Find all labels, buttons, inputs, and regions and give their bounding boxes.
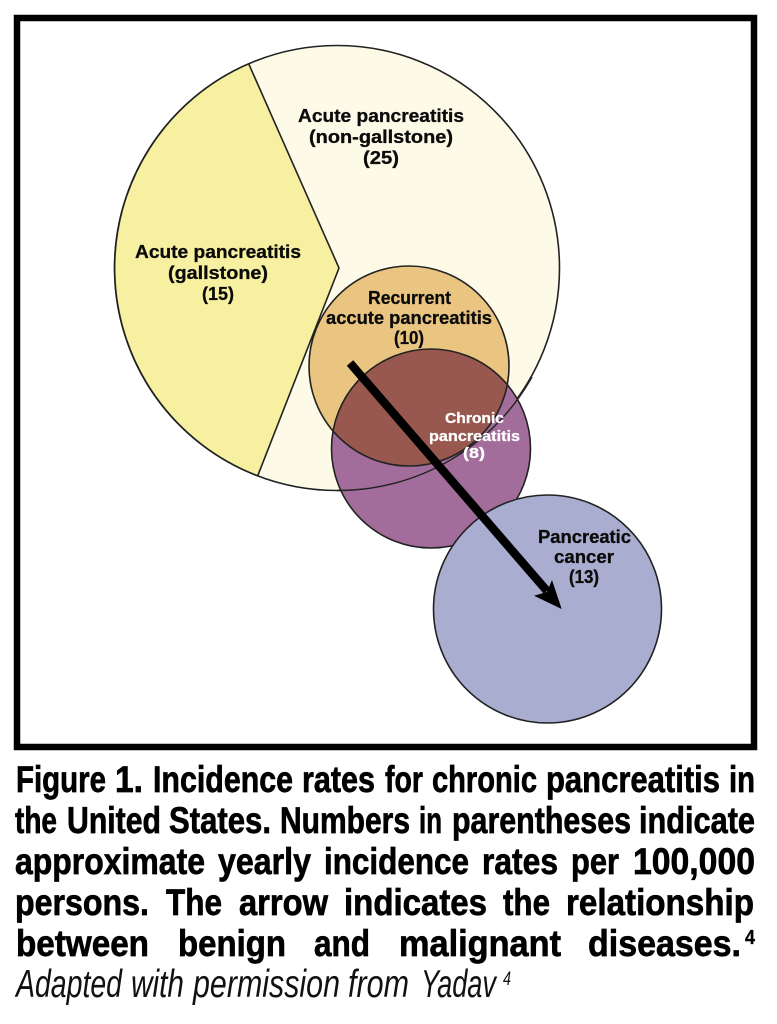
label: non-gallstone: (non-gallstone) bbox=[309, 127, 453, 147]
label: gallstone: (gallstone) bbox=[168, 263, 268, 283]
caption: for bbox=[385, 758, 423, 800]
label: non-gallstone: (25) bbox=[363, 148, 399, 168]
label: cancer: (13) bbox=[569, 567, 599, 587]
label: gallstone: (15) bbox=[202, 284, 234, 304]
circle: pancreatic cancer bbox=[434, 495, 662, 723]
label: non-gallstone: Acute pancreatitis bbox=[298, 106, 464, 126]
caption: benign bbox=[178, 922, 286, 964]
label: recurrent: accute pancreatitis bbox=[326, 308, 492, 328]
caption: parentheses bbox=[452, 799, 631, 841]
caption: persons. bbox=[15, 881, 149, 923]
caption: Incidence bbox=[153, 758, 293, 800]
caption: 100,000 bbox=[633, 840, 755, 882]
label: chronic: Chronic bbox=[445, 410, 504, 427]
caption: rates bbox=[302, 758, 375, 800]
caption: incidence bbox=[324, 840, 469, 882]
source credit: from bbox=[348, 963, 409, 1006]
caption: arrow bbox=[239, 881, 329, 923]
caption: United bbox=[67, 799, 161, 841]
label: recurrent: Recurrent bbox=[368, 288, 451, 308]
caption: The bbox=[166, 881, 222, 923]
overlap: recurrent and chronic bbox=[334, 350, 506, 466]
outline: recurrent circle bbox=[309, 266, 509, 466]
label: cancer bbox=[538, 527, 631, 587]
caption: per bbox=[571, 840, 619, 882]
source credit: 4 bbox=[503, 969, 511, 990]
label: cancer: cancer bbox=[554, 547, 614, 567]
caption: and bbox=[314, 922, 370, 964]
caption: States. bbox=[169, 799, 271, 841]
source credit: Adapted bbox=[15, 963, 123, 1006]
label: chronic: pancreatitis bbox=[429, 428, 520, 445]
segment: acute pancreatitis gallstone bbox=[115, 64, 339, 476]
caption bbox=[15, 758, 756, 964]
circle: recurrent acute pancreatitis bbox=[309, 266, 509, 466]
caption: 4 bbox=[745, 926, 756, 949]
caption: diseases. bbox=[588, 922, 741, 964]
caption: malignant bbox=[399, 922, 561, 964]
label: non-gallstone bbox=[298, 106, 464, 168]
caption: indicate bbox=[639, 799, 755, 841]
label: chronic: (8) bbox=[463, 445, 485, 462]
circle: acute pancreatitis non-gallstone bbox=[114, 46, 560, 490]
outline: chronic circle bbox=[332, 349, 530, 548]
caption: pancreatitis bbox=[546, 758, 720, 800]
source credit: permission bbox=[192, 963, 340, 1006]
label: gallstone bbox=[135, 242, 301, 304]
caption: the bbox=[503, 881, 550, 923]
venn diagram bbox=[114, 46, 662, 723]
caption: in bbox=[729, 758, 755, 800]
source credit bbox=[15, 963, 511, 1006]
caption: rates bbox=[482, 840, 558, 882]
label: recurrent: (10) bbox=[394, 328, 424, 348]
figure frame bbox=[17, 18, 754, 747]
caption: in bbox=[419, 799, 442, 841]
label: cancer: Pancreatic bbox=[538, 527, 631, 547]
source credit: with bbox=[131, 963, 184, 1006]
caption: approximate bbox=[15, 840, 205, 882]
source credit: Yadav bbox=[421, 963, 498, 1006]
outline: non-gallstone circle edge bbox=[337, 377, 532, 491]
label: recurrent bbox=[326, 288, 492, 348]
caption: chronic bbox=[432, 758, 537, 800]
caption: yearly bbox=[218, 840, 311, 882]
caption: the bbox=[15, 799, 57, 841]
caption: between bbox=[16, 922, 149, 964]
label: gallstone: Acute pancreatitis bbox=[135, 242, 301, 262]
circle: chronic pancreatitis bbox=[332, 349, 530, 548]
caption: indicates bbox=[344, 881, 487, 923]
label: chronic bbox=[429, 410, 520, 462]
caption: Numbers bbox=[280, 799, 410, 841]
caption: Figure bbox=[16, 758, 106, 800]
arrow: benign to malignant bbox=[350, 363, 562, 609]
caption: 1. bbox=[115, 758, 143, 800]
caption: relationship bbox=[566, 881, 754, 923]
